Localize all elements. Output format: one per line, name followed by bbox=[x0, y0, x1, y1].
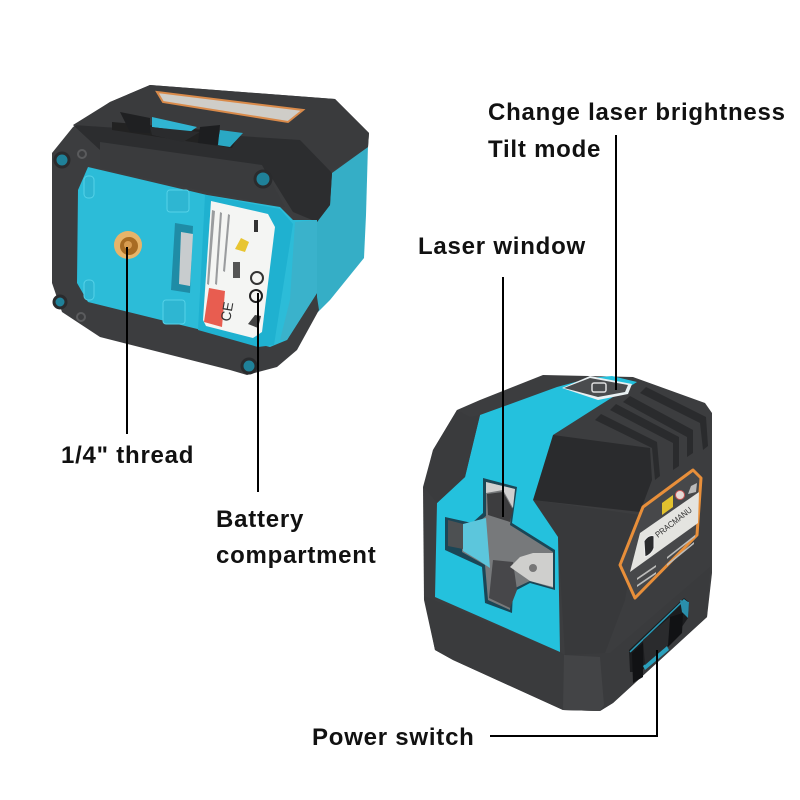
small housing rings bbox=[77, 150, 86, 321]
leader line: laser window bbox=[502, 277, 504, 517]
lower base bbox=[424, 567, 710, 711]
label: battery compartment: compartment bbox=[216, 542, 376, 569]
battery latch bbox=[171, 223, 193, 293]
label: laser window: Laser window bbox=[418, 233, 586, 260]
battery compartment raised edge bbox=[198, 195, 293, 347]
top switch bbox=[112, 112, 243, 148]
label sticker: CE bbox=[217, 301, 236, 323]
device: front view of laser level bbox=[423, 375, 712, 711]
dark housing bbox=[52, 85, 369, 375]
right cyan side bbox=[290, 145, 368, 312]
orange product label: PRACMANU bbox=[653, 505, 694, 540]
label: power switch: Power switch bbox=[312, 724, 475, 751]
orange product label bbox=[620, 470, 701, 598]
leader line: battery compartment bbox=[257, 293, 259, 492]
label: tilt mode: Tilt mode bbox=[488, 136, 601, 163]
leader line: brightness and tilt mode bbox=[615, 135, 617, 390]
label: change laser brightness: Change laser brightness bbox=[488, 99, 786, 126]
left dark panel bbox=[424, 410, 480, 503]
brass thread insert bbox=[114, 231, 142, 259]
cyan front shell bbox=[435, 376, 637, 652]
cyan base plate bbox=[77, 167, 317, 347]
lower front facet bbox=[533, 500, 640, 655]
leader line: 1/4 inch thread bbox=[126, 247, 128, 434]
label: battery compartment: Battery bbox=[216, 506, 304, 533]
label: thread: 1/4" thread bbox=[61, 442, 194, 469]
top panel bbox=[562, 376, 632, 400]
corner screws bbox=[54, 153, 271, 373]
top face bbox=[73, 85, 369, 172]
leader line: power switch bbox=[490, 650, 657, 736]
dark housing bbox=[423, 375, 712, 711]
top ribs bbox=[595, 387, 708, 480]
power switch bbox=[629, 598, 689, 683]
plate indents bbox=[84, 176, 189, 324]
upper right facet bbox=[533, 435, 652, 512]
device: rear view of laser level bbox=[52, 85, 369, 375]
window bbox=[445, 478, 555, 613]
label sticker bbox=[203, 201, 275, 338]
top label bbox=[157, 92, 303, 122]
